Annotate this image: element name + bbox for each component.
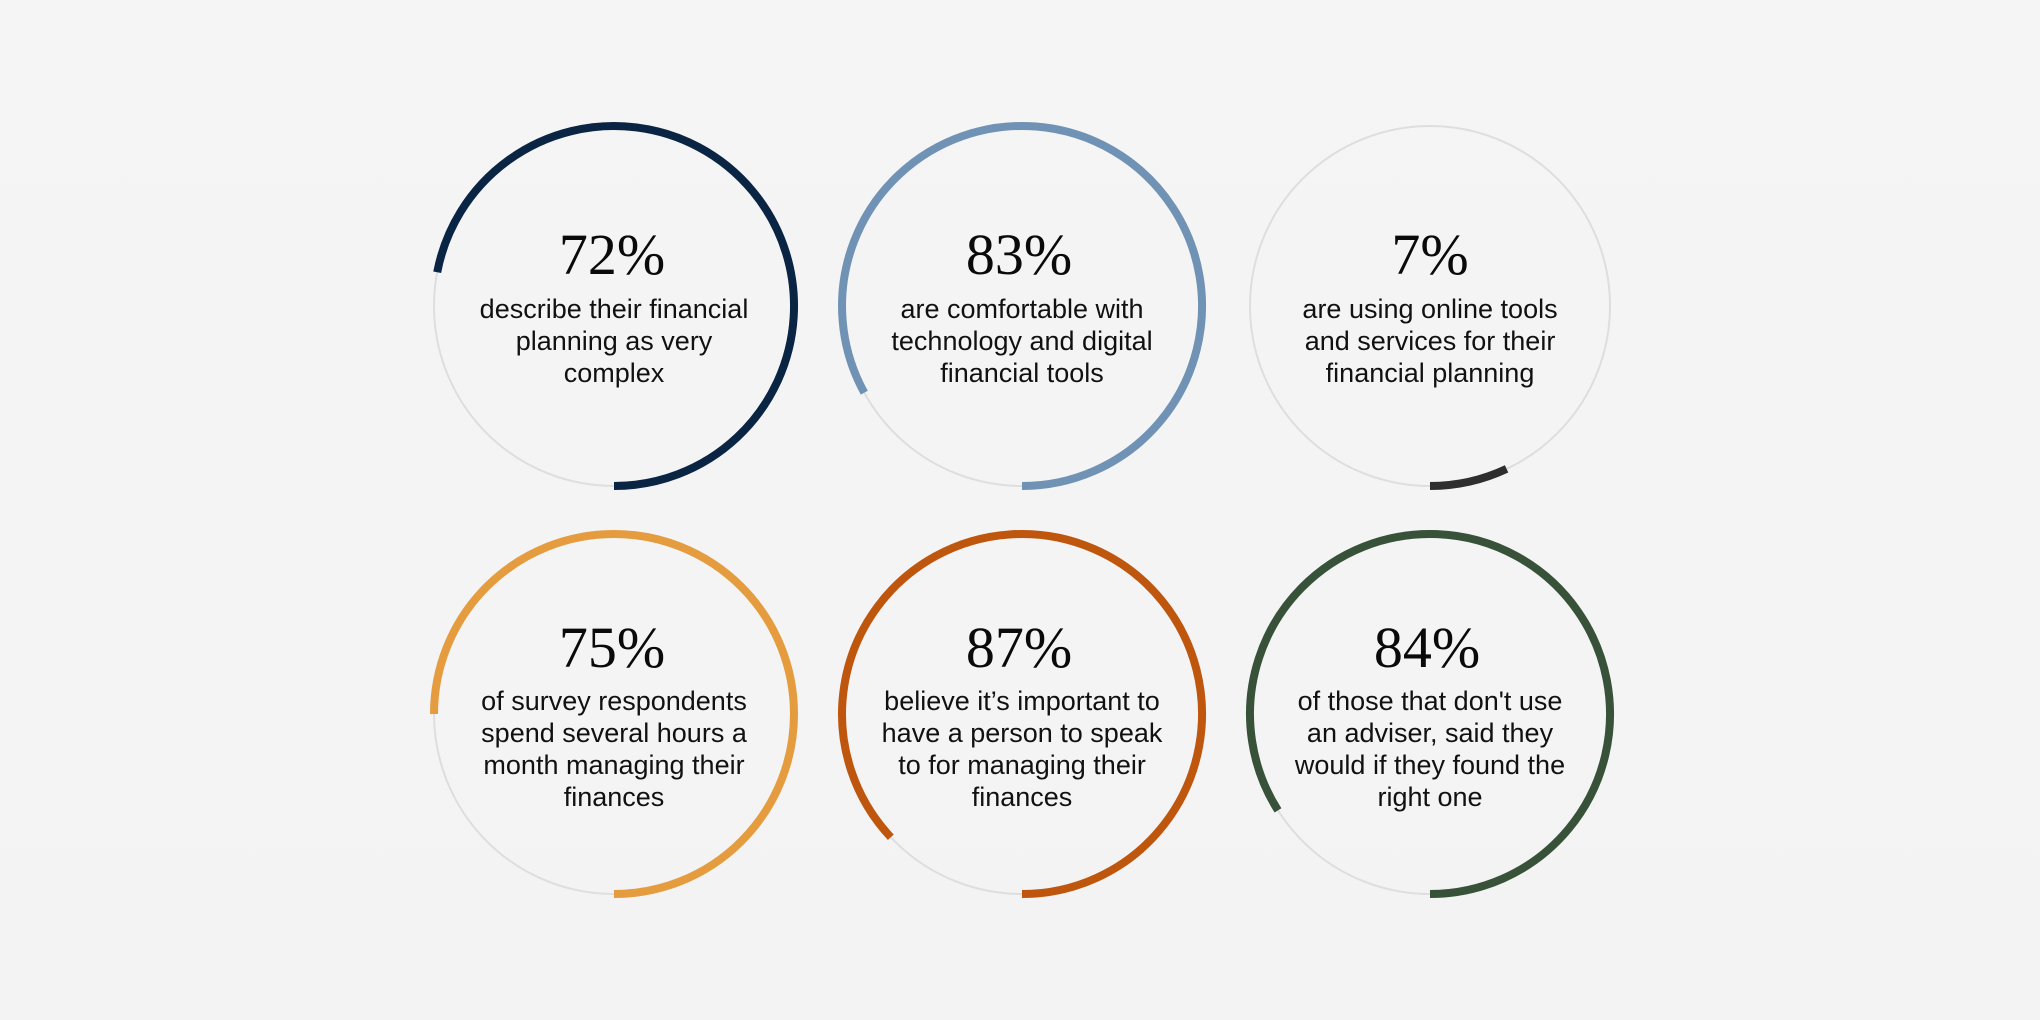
description: spend several hours a <box>481 718 748 748</box>
progress arc 7% <box>1430 469 1507 486</box>
ring track <box>842 126 1202 486</box>
ring track <box>1250 126 1610 486</box>
number: 87%: 87% <box>966 615 1072 680</box>
number: 7%: 7% <box>1391 222 1469 287</box>
number: 72%: 72% <box>559 222 665 287</box>
progress arc 84% <box>1250 534 1610 894</box>
ring track <box>434 126 794 486</box>
description: of survey respondents <box>481 686 747 716</box>
description: planning as very <box>516 326 713 356</box>
description: are using online tools <box>1302 294 1558 324</box>
description: an adviser, said they <box>1307 718 1554 748</box>
description: describe their financial <box>480 294 748 324</box>
description: right one <box>1377 782 1483 812</box>
panel: 75% spend several hours <box>434 534 794 894</box>
panel: 87% want a person to speak to <box>842 534 1202 894</box>
description: technology and digital <box>891 326 1153 356</box>
description: are comfortable with <box>900 294 1144 324</box>
progress arc 75% <box>434 534 794 894</box>
description: and services for their <box>1305 326 1555 356</box>
description: to for managing their <box>898 750 1146 780</box>
progress arc 87% <box>842 534 1202 894</box>
description: financial planning <box>1326 358 1534 388</box>
panel: 84% would use an adviser <box>1250 534 1610 894</box>
number: 83%: 83% <box>966 222 1072 287</box>
ring track <box>1250 534 1610 894</box>
description: complex <box>564 358 665 388</box>
number: 84%: 84% <box>1374 615 1480 680</box>
description: financial tools <box>940 358 1104 388</box>
progress arc 83% <box>842 126 1202 486</box>
description: have a person to speak <box>882 718 1163 748</box>
description: finances <box>972 782 1072 812</box>
progress arc 72% <box>437 126 794 486</box>
description: month managing their <box>483 750 745 780</box>
description: of those that don't use <box>1298 686 1562 716</box>
number: 75%: 75% <box>559 615 665 680</box>
ring track <box>842 534 1202 894</box>
panel: 83% comfortable with technology <box>842 126 1202 486</box>
ring track <box>434 534 794 894</box>
description: believe it’s important to <box>884 686 1160 716</box>
panel: 7% using online tools <box>1250 126 1610 486</box>
description: finances <box>564 782 664 812</box>
panel: 72% complex planning <box>434 126 794 486</box>
description: would if they found the <box>1294 750 1565 780</box>
